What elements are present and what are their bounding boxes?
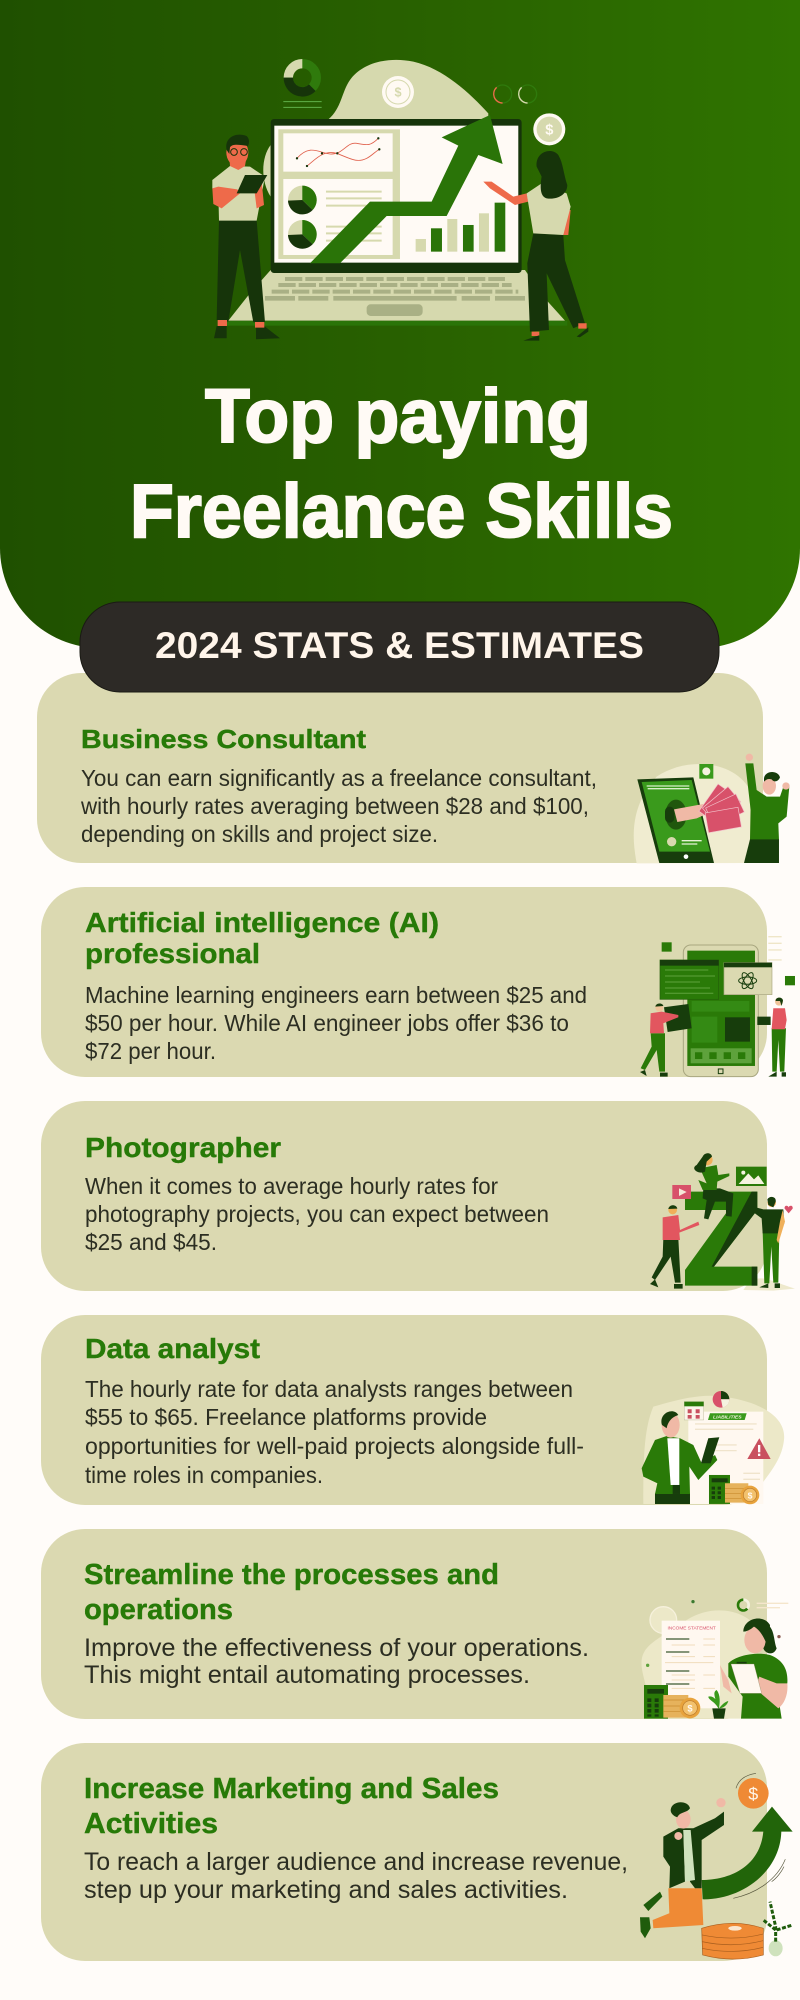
growth arrow bbox=[310, 115, 503, 263]
body text: opportunities for well-paid projects alongside full- bbox=[85, 1433, 584, 1459]
panel: artificial intelligence professional bbox=[41, 887, 795, 1077]
illustration: analyst with liabilities report bbox=[642, 1391, 784, 1504]
body text: $50 per hour. While AI engineer jobs offer $36 to bbox=[85, 1010, 569, 1036]
illustration: app developers bbox=[640, 937, 795, 1077]
body text bbox=[84, 1634, 589, 1689]
person left bbox=[641, 1033, 665, 1072]
icon: small rings bbox=[494, 85, 537, 103]
body text: $55 to $65. Freelance platforms provide bbox=[85, 1404, 487, 1430]
body text bbox=[80, 765, 597, 847]
body text: time roles in companies. bbox=[85, 1462, 323, 1488]
man walking bbox=[652, 1238, 681, 1283]
body text bbox=[84, 1848, 628, 1904]
illustration: big letter Z with creators bbox=[650, 1153, 795, 1291]
hero illustration: laptop with growth chart bbox=[212, 59, 588, 341]
body text: When it comes to average hourly rates for bbox=[85, 1173, 498, 1199]
section banner: 2024 stats bbox=[80, 602, 719, 692]
body text: This might entail automating processes. bbox=[84, 1661, 530, 1689]
body text bbox=[85, 1173, 549, 1255]
body text: $72 per hour. bbox=[85, 1038, 216, 1064]
icon: orange dollar coin bbox=[736, 1773, 769, 1809]
icon: calendar bbox=[684, 1402, 704, 1420]
illustration: man celebrating growth bbox=[640, 1773, 793, 1959]
income statement document bbox=[662, 1621, 720, 1708]
panel: data analyst bbox=[41, 1315, 784, 1505]
heading: Activities bbox=[84, 1808, 218, 1840]
person right bbox=[757, 1017, 771, 1025]
woman sitting on letter bbox=[703, 1188, 733, 1219]
heading: Data analyst bbox=[85, 1333, 260, 1364]
laptop screen bbox=[271, 115, 522, 273]
header banner bbox=[0, 0, 800, 648]
man with beard bbox=[763, 1232, 779, 1283]
icon: dollar coin top: $ bbox=[394, 86, 401, 100]
body text: To reach a larger audience and increase revenue, bbox=[84, 1848, 628, 1876]
icon: calculator bbox=[709, 1475, 730, 1504]
icon: cash fan bbox=[699, 784, 744, 833]
liabilities badge bbox=[708, 1413, 747, 1421]
body text: step up your marketing and sales activities. bbox=[84, 1876, 568, 1904]
illustration: tablet paying cash bbox=[634, 754, 790, 863]
body text: depending on skills and project size. bbox=[81, 821, 438, 847]
body text: $25 and $45. bbox=[85, 1229, 217, 1255]
title: Top paying bbox=[205, 374, 591, 459]
title: Freelance Skills bbox=[130, 469, 673, 554]
analyst bbox=[655, 1493, 690, 1504]
heading: Business Consultant bbox=[81, 724, 366, 754]
bar chart bbox=[416, 203, 505, 252]
income statement document: INCOME STATEMENT bbox=[667, 1626, 716, 1631]
heading bbox=[84, 1559, 499, 1626]
heading: Photographer bbox=[85, 1132, 281, 1163]
liabilities badge: LIABILITIES bbox=[713, 1415, 742, 1421]
icon: coins bbox=[663, 1695, 700, 1718]
icon: pie bbox=[713, 1391, 729, 1408]
icon: orange dollar coin: $ bbox=[748, 1784, 758, 1804]
icon: dollar coin right: $ bbox=[545, 123, 553, 139]
woman with clipboard bbox=[728, 1654, 787, 1719]
icon: coin stack bbox=[702, 1923, 763, 1959]
heading: Streamline the processes and bbox=[84, 1559, 499, 1591]
line chart bbox=[296, 137, 380, 167]
icon: warning triangle bbox=[747, 1438, 771, 1459]
icon: plant bbox=[708, 1690, 728, 1719]
body text: photography projects, you can expect between bbox=[85, 1201, 549, 1227]
man with tablet bbox=[212, 135, 280, 339]
celebrating man bbox=[640, 1798, 726, 1938]
body text: You can earn significantly as a freelance consultant, bbox=[81, 765, 597, 791]
icon: heart bbox=[785, 1206, 793, 1213]
icon: calculator bbox=[644, 1685, 668, 1719]
icon: image bbox=[736, 1167, 767, 1186]
background blob bbox=[228, 60, 565, 321]
panel: streamline the processes and operations bbox=[41, 1529, 788, 1719]
illustration: income statement review bbox=[642, 1600, 788, 1719]
body text: with hourly rates averaging between $28 and $100, bbox=[80, 793, 589, 819]
icon: coins bbox=[725, 1483, 759, 1504]
woman pointing at chart bbox=[483, 151, 588, 341]
icon: coins: $ bbox=[748, 1490, 753, 1500]
icon: dollar coin top bbox=[382, 76, 414, 108]
body text bbox=[85, 982, 587, 1064]
section banner: 2024 stats: 2024 STATS & ESTIMATES bbox=[155, 625, 644, 666]
heading bbox=[85, 907, 439, 969]
body text: Machine learning engineers earn between $25 and bbox=[85, 982, 587, 1008]
icon: progress donut bbox=[738, 1600, 749, 1610]
icon: potted plant bbox=[763, 1902, 793, 1956]
heading: Increase Marketing and Sales bbox=[84, 1773, 499, 1805]
title bbox=[130, 374, 673, 554]
icon: dollar coin right bbox=[533, 113, 565, 145]
panel: increase marketing and sales activities bbox=[41, 1743, 793, 1961]
body text: Improve the effectiveness of your operations. bbox=[84, 1634, 589, 1662]
panel: business consultant bbox=[37, 673, 790, 863]
heading: Artificial intelligence (AI) bbox=[85, 907, 439, 938]
heading: operations bbox=[84, 1594, 233, 1626]
heading bbox=[84, 1773, 499, 1840]
icon: play bbox=[672, 1185, 691, 1199]
icon: coins: $ bbox=[687, 1704, 693, 1714]
person cheering bbox=[745, 763, 789, 840]
icon: donut chart bbox=[283, 59, 322, 107]
laptop base and keyboard bbox=[226, 279, 567, 326]
body text bbox=[85, 1376, 584, 1488]
pie charts bbox=[288, 186, 382, 249]
heading: professional bbox=[85, 938, 260, 969]
icon: atom bbox=[739, 971, 757, 990]
panel: photographer bbox=[41, 1101, 795, 1291]
growth arrow bbox=[702, 1807, 793, 1899]
body text: The hourly rate for data analysts ranges between bbox=[85, 1376, 573, 1402]
